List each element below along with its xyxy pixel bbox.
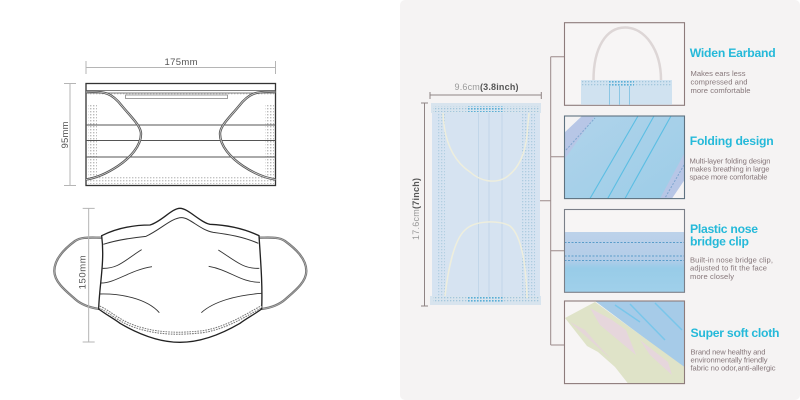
heading: folding design: Folding design [690,134,774,148]
text: nose bridge clip description: more closely [690,272,734,281]
photo: blue surgical mask [430,103,541,305]
text: nose bridge clip description: Built-in nose bridge clip, [690,256,773,264]
heading: plastic nose bridge clip: Plastic nose [690,222,758,236]
pleats [99,250,262,313]
panel: folding design [564,116,684,199]
text: folding design description: Multi-layer folding design [690,156,770,166]
panel: super soft cloth [564,301,684,384]
text: super soft cloth description: fabric no odor,anti-allergic [690,364,776,372]
heading: plastic nose bridge clip: bridge clip [690,234,749,248]
panel: right background [400,0,800,400]
dimension: 150mm [78,208,95,342]
text: folding design description: space more comfortable [690,172,768,182]
dimension: mask height: 17.6cm(7inch) [411,178,421,240]
ear loop [594,28,661,80]
ear loops [86,92,141,180]
dimension: mask width: 9.6cm(3.8inch) [454,82,518,92]
text: folding design description: makes breathing in large [690,165,770,174]
mask detail [581,80,672,105]
ear loop left [54,238,102,309]
dimension: 175mm width: 175mm [164,57,198,68]
dimension: 95mm height [60,84,76,186]
nose fold [103,218,258,244]
heading: widen earband: Widen Earband [690,46,776,60]
panel: flat mask technical drawing [60,57,276,186]
panel: widen earband [564,23,684,105]
ear loops [443,113,529,181]
dimension: 95mm height: 95mm [60,121,71,148]
text: nose bridge clip description: adjusted to fit the face [690,264,767,272]
text: widen earband description: Makes ears less [690,69,746,78]
dimension: 150mm: 150mm [78,255,89,289]
flat mask outline [86,84,276,186]
text: widen earband description: compressed and [690,78,748,86]
dimension: mask width [430,82,541,99]
heading: super soft cloth: Super soft cloth [690,326,780,340]
text: super soft cloth description: Brand new healthy and [690,348,766,356]
panel: plastic nose bridge clip [564,210,684,292]
ear loop right [259,238,306,309]
stitch line [99,307,262,333]
connector lines [540,57,564,345]
panel: worn mask technical drawing [54,208,306,342]
mask body [99,208,262,342]
dimension: 175mm width [86,57,276,74]
text: super soft cloth description: environmentally friendly [690,356,768,365]
dimension: mask height [411,103,428,306]
text: widen earband description: more comfortable [690,86,750,95]
